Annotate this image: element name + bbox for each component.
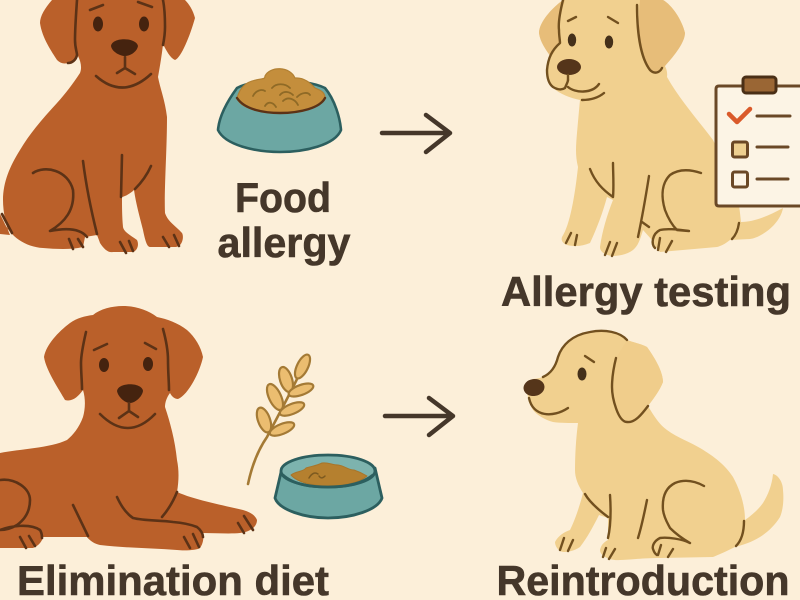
- heading: Food allergy: Food: [235, 174, 331, 221]
- icon: sad brown sitting dog: [0, 0, 195, 253]
- heading: Allergy testing: Allergy testing: [501, 268, 791, 315]
- arrow: bottom: [385, 398, 453, 435]
- icon: wheat stalk: [248, 352, 315, 484]
- heading: Food allergy: [218, 174, 351, 266]
- icon: sad brown lying dog: [0, 306, 257, 550]
- heading: Food allergy: allergy: [218, 219, 351, 266]
- icon: checklist clipboard: [716, 77, 800, 206]
- arrow: top: [382, 115, 450, 152]
- icon: light dog sitting with concern: [539, 0, 783, 256]
- icon: happy light sitting dog: [522, 331, 783, 560]
- icon: food bowl top: [218, 69, 341, 152]
- icon: food bowl bottom: [275, 455, 382, 518]
